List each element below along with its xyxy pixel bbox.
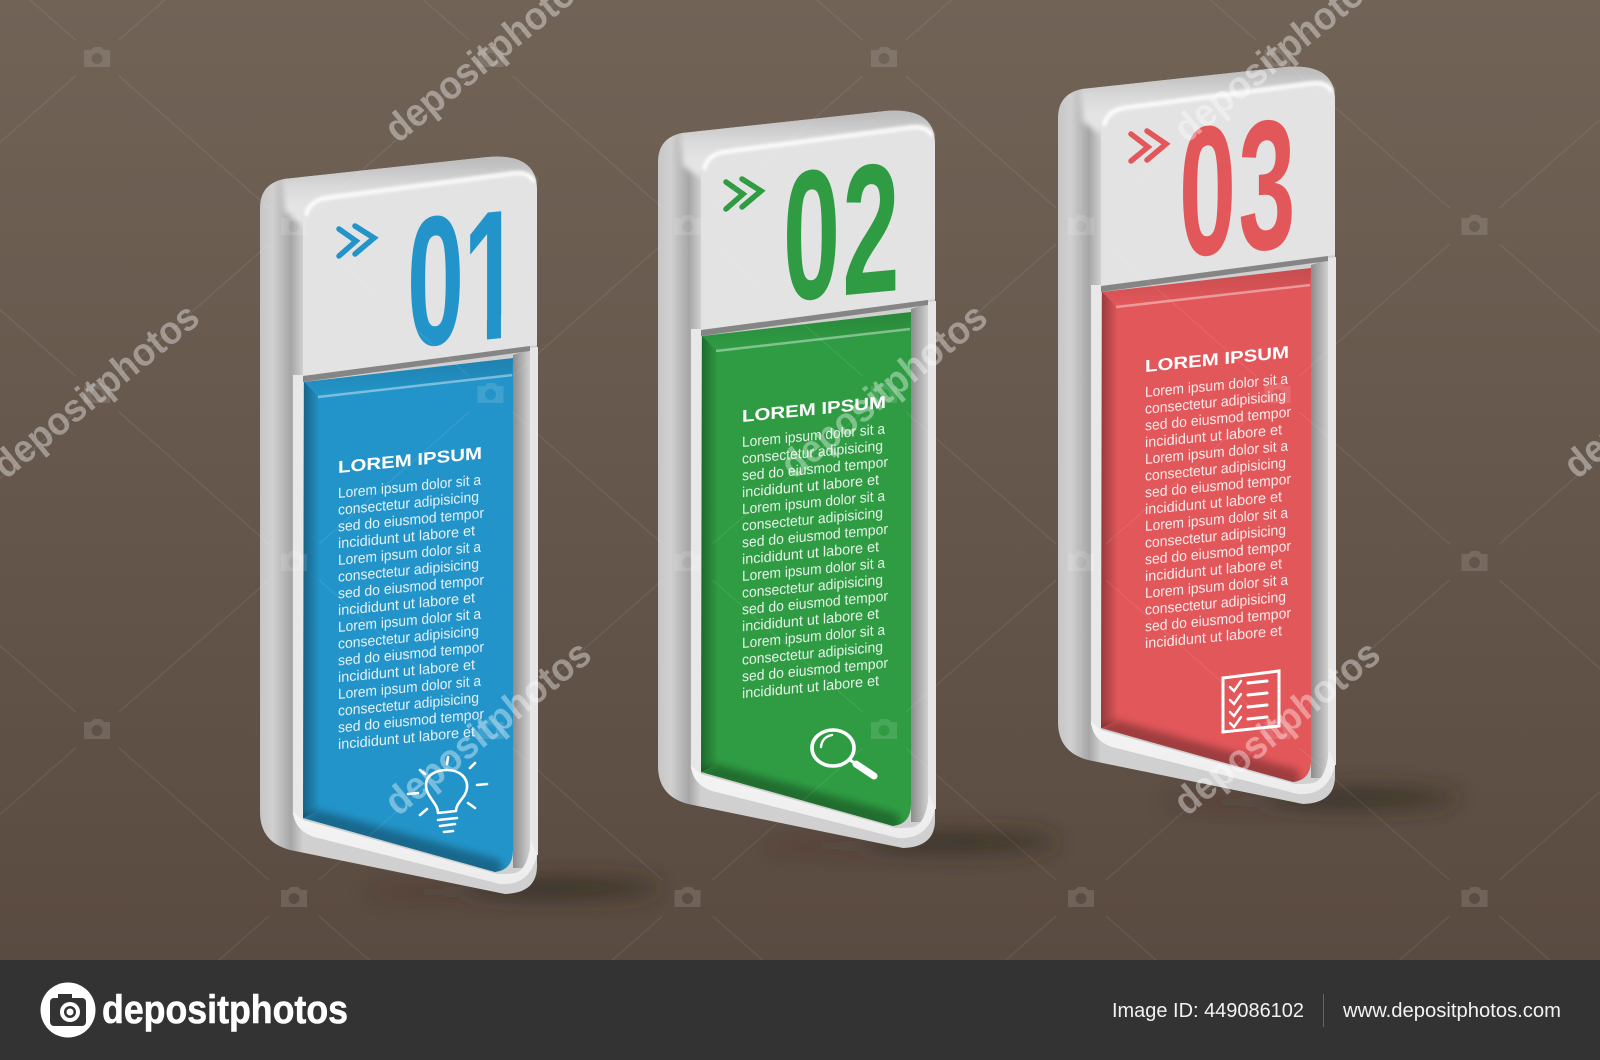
card 03 body text: sed do eiusmod tempor (1145, 539, 1291, 568)
panel: card 02 (658, 99, 1058, 854)
card 01 body text: sed do eiusmod tempor (338, 707, 484, 736)
footer logo: depositphotos (102, 988, 348, 1032)
card 01 chevron icon (339, 226, 374, 256)
card 02 body text: sed do eiusmod tempor (742, 656, 888, 685)
card 03 body text: Lorem ipsum dolor sit a (1145, 572, 1289, 602)
card 03 chevron icon (1131, 131, 1166, 161)
card 03 body text: sed do eiusmod tempor (1145, 606, 1291, 635)
card 03 body text: incididunt ut labore et (1145, 422, 1282, 451)
card 01 body text: Lorem ipsum dolor sit a (338, 472, 482, 502)
card 01 body text: sed do eiusmod tempor (338, 640, 484, 669)
card 01 frame (260, 145, 545, 894)
card 02 body text: consectetur adipisicing (742, 639, 883, 669)
card 01 number: 01 (407, 170, 520, 386)
card 03 body text (1145, 371, 1291, 652)
card 02 heading: LOREM IPSUM (742, 393, 886, 426)
card 02 body text (742, 421, 888, 702)
card 01 body text: Lorem ipsum dolor sit a (338, 673, 482, 703)
card 03 body text: consectetur adipisicing (1145, 388, 1286, 418)
card 01 body text: Lorem ipsum dolor sit a (338, 539, 482, 569)
panel: card 03 (1058, 55, 1458, 810)
card 01 body text: sed do eiusmod tempor (338, 573, 484, 602)
card 01 body text: consectetur adipisicing (338, 489, 479, 519)
card 02 body text: Lorem ipsum dolor sit a (742, 622, 886, 652)
card 01 body text: consectetur adipisicing (338, 690, 479, 720)
card 02 body text: sed do eiusmod tempor (742, 522, 888, 551)
card 01 coloured panel (295, 358, 513, 885)
card 02 shadow (758, 831, 1058, 854)
card 03 heading: LOREM IPSUM (1145, 343, 1289, 376)
card 01 shadow (360, 877, 660, 900)
card 02 body text: incididunt ut labore et (742, 606, 879, 635)
watermark: depositphotos repeats: depositphotos (377, 632, 600, 824)
card 01 body text: consectetur adipisicing (338, 623, 479, 653)
card 01 body text (338, 472, 484, 753)
card 01 body text: incididunt ut labore et (338, 523, 475, 552)
card 02 frame (658, 99, 943, 848)
card 01 body text: sed do eiusmod tempor (338, 506, 484, 535)
watermark: depositphotos repeats (0, 0, 1600, 824)
card 02 body text: consectetur adipisicing (742, 438, 883, 468)
icon: light bulb (408, 757, 487, 832)
card 03 body text: Lorem ipsum dolor sit a (1145, 371, 1289, 401)
icon: magnifying glass (812, 730, 874, 776)
card 01 body text: consectetur adipisicing (338, 556, 479, 586)
card 01 body text: Lorem ipsum dolor sit a (338, 606, 482, 636)
card 03 body text: incididunt ut labore et (1145, 556, 1282, 585)
card 01 body text: incididunt ut labore et (338, 590, 475, 619)
card 02 body text: incididunt ut labore et (742, 539, 879, 568)
watermark: depositphotos repeats: depositphotos (1166, 632, 1389, 824)
panel: card 01 (260, 145, 660, 900)
card 02 body text: consectetur adipisicing (742, 572, 883, 602)
card 02 body text: Lorem ipsum dolor sit a (742, 488, 886, 518)
card 03 body text: incididunt ut labore et (1145, 489, 1282, 518)
footer bar (0, 960, 1600, 1060)
card 03 body text: Lorem ipsum dolor sit a (1145, 438, 1289, 468)
card 03 coloured panel (1093, 268, 1311, 795)
card 02 body text: sed do eiusmod tempor (742, 589, 888, 618)
card 03 shadow (1158, 787, 1458, 810)
watermark: depositphotos repeats: depositphotos (773, 295, 996, 487)
card 01 heading: LOREM IPSUM (338, 444, 482, 477)
card 03 body text: consectetur adipisicing (1145, 589, 1286, 619)
card 02 body text: Lorem ipsum dolor sit a (742, 555, 886, 585)
card 03 number: 03 (1179, 79, 1295, 296)
card 02 body text: Lorem ipsum dolor sit a (742, 421, 886, 451)
card 03 frame (1058, 55, 1343, 804)
card 01 body text: incididunt ut labore et (338, 724, 475, 753)
card 02 coloured panel (693, 312, 911, 839)
card 02 number: 02 (783, 123, 899, 340)
footer logo (40, 982, 348, 1038)
card 03 body text: sed do eiusmod tempor (1145, 472, 1291, 501)
card 03 body text: sed do eiusmod tempor (1145, 405, 1291, 434)
card 01 body text: incididunt ut labore et (338, 657, 475, 686)
card 02 body text: consectetur adipisicing (742, 505, 883, 535)
card 03 body text: incididunt ut labore et (1145, 623, 1282, 652)
card 02 body text: incididunt ut labore et (742, 472, 879, 501)
card 02 chevron icon (726, 179, 761, 209)
icon: checklist (1223, 671, 1279, 732)
card 03 body text: Lorem ipsum dolor sit a (1145, 505, 1289, 535)
footer url: www.depositphotos.com (1342, 1000, 1561, 1022)
footer image id: Image ID: 449086102 (1112, 1000, 1304, 1022)
card 02 body text: sed do eiusmod tempor (742, 455, 888, 484)
card 03 body text: consectetur adipisicing (1145, 455, 1286, 485)
card 03 body text: consectetur adipisicing (1145, 522, 1286, 552)
card 02 body text: incididunt ut labore et (742, 673, 879, 702)
